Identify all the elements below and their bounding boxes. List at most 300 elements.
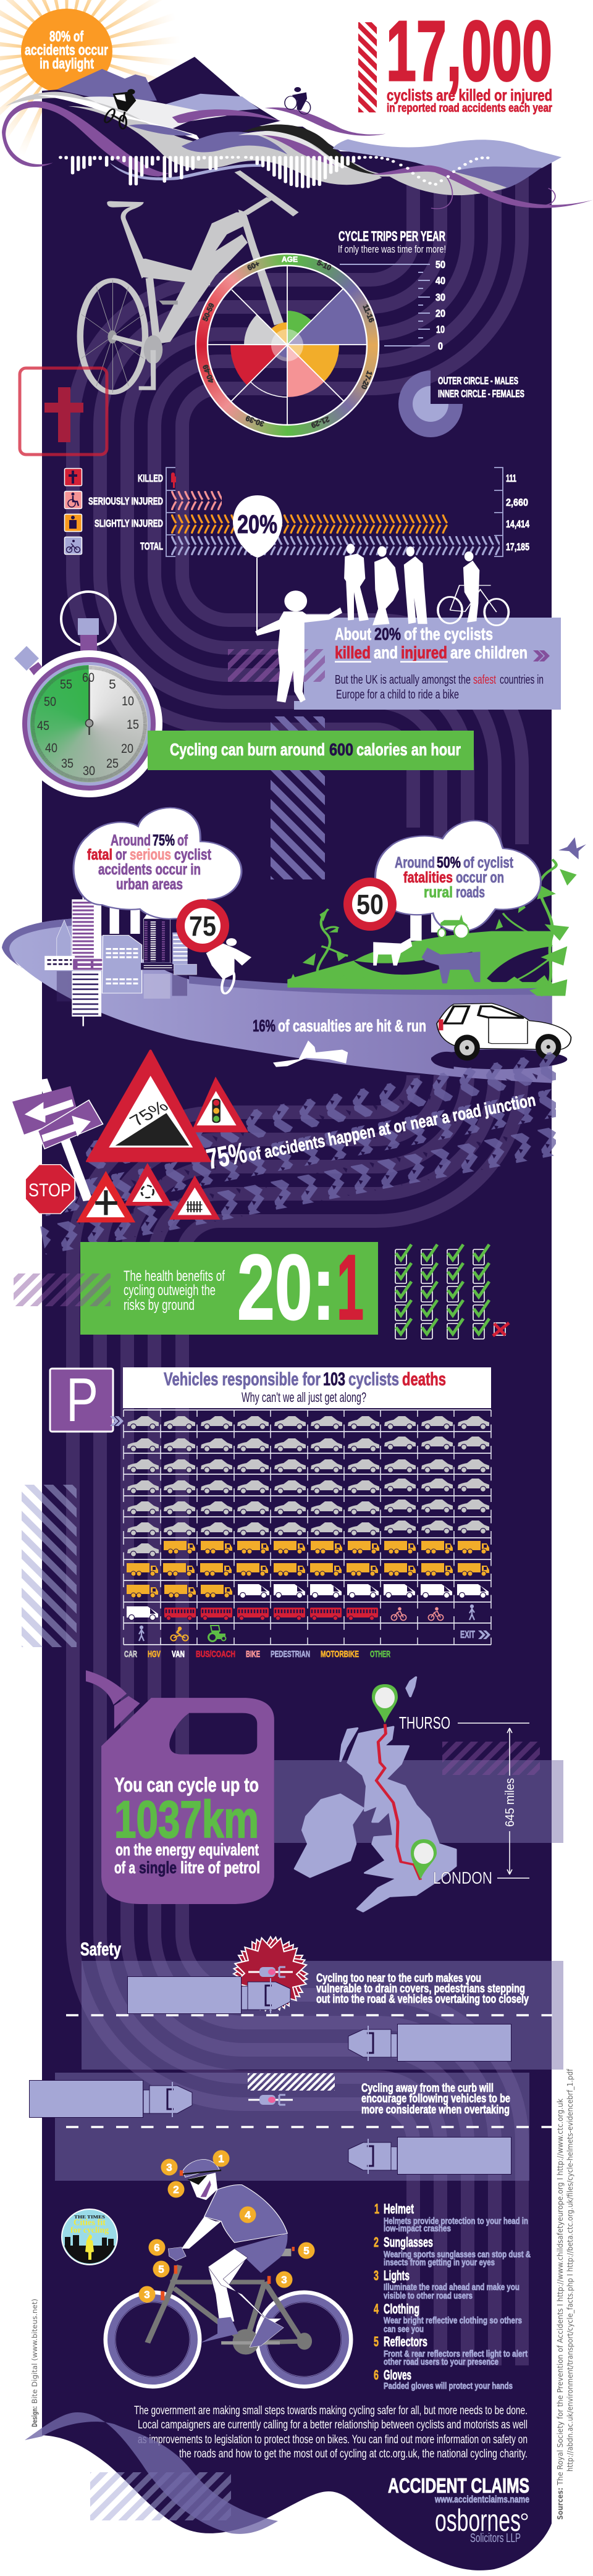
- title: 103: [323, 1369, 345, 1390]
- hatch behind child: [228, 649, 325, 682]
- illustration: lilac road: [2, 918, 552, 1083]
- stop sign: [25, 1165, 75, 1214]
- legend: vehicle types: VAN: [172, 1649, 185, 1659]
- item: clothing: [374, 2301, 522, 2335]
- icon: 75 speed sign: 75: [189, 910, 216, 942]
- strapline: Solicitors LLP: [470, 2532, 521, 2545]
- text: sources: The Royal Society for the Prevention of Accidents I http://www.childsafetyeurope.org I http://www.ctc.org.uk: [555, 2098, 565, 2486]
- numbered markers: 5: [303, 2245, 309, 2257]
- text: curb warning: out into the road & vehicles overtaking too closely: [316, 1993, 529, 2006]
- cloud text: urban areas: [116, 876, 183, 893]
- url: www.accidentclaims.name: [434, 2494, 529, 2505]
- direction sign right: [38, 1100, 103, 1149]
- bar: killed: [171, 472, 176, 488]
- cloud text: 50%: [437, 854, 461, 871]
- text: killed and injured: killed: [335, 643, 371, 662]
- text: killed and injured: are children: [450, 643, 528, 662]
- illustration: petrol can: [86, 1670, 274, 1904]
- illustration: stopwatch: [14, 592, 162, 797]
- stopwatch ring: [61, 592, 116, 646]
- stopwatch white case: [15, 650, 162, 797]
- road dashes: [66, 2015, 552, 2127]
- text: calories: Cycling can burn around: [170, 740, 325, 759]
- icon: top view bike: [248, 2095, 293, 2105]
- cloud text: cyclist: [174, 846, 212, 863]
- stopwatch numbers: 60: [82, 671, 95, 685]
- item: lights: Illuminate the road ahead and make you: [384, 2282, 519, 2293]
- text: hit and run: of casualties are hit & run: [278, 1017, 426, 1035]
- icon: ticks and cross: [395, 1244, 509, 1339]
- item: sunglasses: Wearing sports sunglasses can stop dust &: [384, 2249, 531, 2260]
- label: Thurso: THURSO: [399, 1713, 450, 1732]
- road band upper: [82, 1961, 563, 2070]
- text: 20:1: 1: [337, 1235, 364, 1339]
- text: calories: 600: [329, 740, 353, 759]
- numbered markers: 3: [281, 2274, 287, 2286]
- cloud shape: [74, 808, 242, 934]
- legend: vehicle types: BUS/COACH: [196, 1649, 235, 1659]
- item: gloves: Gloves: [384, 2367, 411, 2383]
- legend: [398, 371, 524, 437]
- illustration: child silhouette: [255, 590, 342, 702]
- icon: jumping cyclist: [206, 938, 251, 994]
- balloon text: 20%: [237, 510, 277, 539]
- text: 20% of cyclists: of the cyclists: [404, 624, 493, 644]
- icon: killed: [64, 468, 82, 485]
- illustration: balloon with 20%: [233, 495, 282, 631]
- title: cyclists: [348, 1369, 399, 1390]
- stopwatch hand: [85, 678, 93, 735]
- text: 80% in daylight: accidents occur: [25, 42, 108, 59]
- text: closing paragraph: [134, 2404, 528, 2461]
- stopwatch ticks: [33, 668, 145, 780]
- illustration: people silhouettes: [344, 543, 508, 625]
- chart axis: 10: [436, 324, 445, 335]
- illustration: mountains and waves: [2, 69, 593, 209]
- category labels: KILLED: [138, 472, 163, 484]
- can text: 1037km: [114, 1790, 259, 1848]
- category labels: SLIGHTLY INJURED: [95, 518, 163, 529]
- icon: lorry: [127, 1976, 290, 2013]
- item: lights: [374, 2268, 519, 2301]
- row 1: [127, 1416, 489, 1429]
- cloud shape: [376, 821, 541, 941]
- row 8: [127, 1563, 489, 1576]
- cloud text: [87, 832, 212, 893]
- text: curb advice: Cycling away from the curb will: [361, 2082, 494, 2095]
- cloud text: Around: [111, 832, 151, 849]
- numbered markers: 4: [245, 2209, 251, 2221]
- map route: [376, 1724, 421, 1880]
- cloud text: [395, 854, 514, 901]
- text: curb advice: more considerate when overtaking: [361, 2104, 510, 2117]
- icon: seriously injured: [64, 492, 82, 509]
- cloud text: rural: [424, 884, 453, 901]
- icon: slate cow: [422, 947, 480, 983]
- stopwatch numbers: 55: [60, 678, 72, 692]
- row 11: [139, 1626, 226, 1642]
- icon: bird: [558, 837, 586, 860]
- logo: Accident Claims: [388, 2474, 529, 2505]
- item: sunglasses: [374, 2234, 531, 2268]
- legend: vehicle types: MOTORBIKE: [321, 1649, 359, 1659]
- values: [506, 472, 529, 553]
- pattern: hatch behind green bar: [271, 716, 325, 879]
- direction sign left: [13, 1087, 78, 1134]
- numbered markers: 3: [166, 2162, 172, 2173]
- icon: total cyclist: [64, 537, 82, 555]
- pattern: hatch near map: [442, 1742, 540, 1775]
- pattern: red hatch block: [358, 22, 377, 112]
- illustration: kitted-out cyclist: [106, 2150, 351, 2386]
- stopwatch crown: [78, 618, 99, 635]
- row 3: [127, 1459, 489, 1472]
- item: gloves: [374, 2367, 513, 2391]
- stopwatch side button: [14, 646, 43, 676]
- illustration: lying person: [273, 1041, 348, 1067]
- frame: [148, 2160, 312, 2355]
- text: safest countries: safest: [473, 673, 496, 687]
- icon: 50 speed sign: [348, 882, 392, 926]
- background: map band: [274, 1760, 563, 1843]
- can text: of a: [114, 1858, 136, 1877]
- text: sources: [555, 2068, 574, 2520]
- text: safest countries: [335, 673, 544, 702]
- crossroad sign: [78, 1172, 134, 1222]
- item: reflectors: other road users to your presence: [384, 2357, 498, 2367]
- text: safest countries: countries in: [500, 673, 544, 687]
- text: STOP: STOP: [28, 1180, 71, 1201]
- icon: oncoming lorry: [348, 2024, 511, 2062]
- item: helmet: low-impact crashes: [384, 2223, 451, 2234]
- chart subheading: If only there was time for more!: [338, 243, 446, 255]
- chart: cycle trips per year radial chart: [195, 229, 524, 437]
- row 2: [127, 1437, 489, 1451]
- values: 14,414: [506, 518, 529, 530]
- distance arrows: [458, 1723, 529, 1878]
- row 7: [127, 1541, 489, 1556]
- text: 80% in daylight: in daylight: [40, 56, 94, 72]
- can body: [101, 1698, 274, 1904]
- legend: vehicle types: OTHER: [370, 1649, 390, 1659]
- panel: children statistic: [294, 618, 561, 710]
- text: curb advice: encourage following vehicles to be: [361, 2092, 510, 2105]
- stopwatch numbers: 20: [121, 742, 133, 756]
- cloud text: of: [177, 832, 188, 849]
- numbered markers: 3: [144, 2289, 150, 2301]
- chart axis: 40: [435, 275, 445, 287]
- row 10: [127, 1605, 474, 1621]
- row 4: [127, 1479, 489, 1493]
- illustration: urban skyline: [44, 884, 196, 1026]
- map land: [295, 1677, 456, 1911]
- text: sources: Sources:: [555, 2488, 565, 2520]
- age labels: 60+: [246, 259, 261, 272]
- text: calories: calories an hour: [356, 740, 461, 759]
- background: road-like stripes: [73, 176, 522, 2365]
- badge text: Cities fit: [74, 2218, 106, 2228]
- icon: slightly injured: [64, 514, 82, 531]
- age labels: [201, 255, 376, 430]
- text: safest countries: But the UK is actually amongst the: [335, 673, 471, 687]
- roundabout sign: [125, 1164, 171, 1206]
- badge text: [70, 2215, 109, 2235]
- row 9: [127, 1584, 489, 1598]
- pin: London: [411, 1839, 437, 1879]
- item: sunglasses: 2: [374, 2234, 379, 2250]
- text: curb warning: Cycling too near to the curb makes you: [316, 1972, 481, 1985]
- numbered markers: 6: [154, 2242, 160, 2254]
- illustration: big bicycle: [80, 170, 299, 393]
- scenario: cycling too near curb: [127, 1928, 529, 2020]
- panel: safety checklist: [374, 2201, 531, 2391]
- item: helmet: 1: [374, 2201, 379, 2217]
- cloud text: Around: [395, 854, 435, 871]
- numbered markers: 1: [218, 2153, 224, 2165]
- text: hit and run: [253, 1017, 426, 1035]
- text: curb warning: vulnerable to drain covers, pedestrians stepping: [316, 1982, 525, 1995]
- item: lights: Lights: [384, 2268, 410, 2283]
- cloud text: accidents occur in: [98, 861, 201, 878]
- panel: 17,000 headline: [358, 4, 552, 115]
- text: design credit: Bite Digital (www.biteus.net): [30, 2299, 39, 2404]
- age labels: AGE: [282, 255, 298, 264]
- panel: urban cloud: [74, 808, 242, 934]
- stopwatch numbers: 5: [109, 678, 116, 692]
- text: killed and injured: [335, 643, 528, 662]
- legend: vehicle types: BIKE: [246, 1649, 260, 1659]
- category labels: SERIOUSLY INJURED: [88, 495, 163, 507]
- item: lights: 3: [374, 2268, 379, 2283]
- age labels: 21-29: [309, 414, 330, 430]
- text: road junction: 75%: [204, 1136, 250, 1175]
- panel: calories bar: [148, 731, 474, 770]
- age labels: 11-16: [361, 303, 376, 324]
- values: 17,185: [506, 541, 529, 553]
- title: deaths: [402, 1369, 446, 1390]
- cloud text: fatalities: [403, 869, 453, 886]
- icon: oncoming lorry: [348, 2137, 511, 2174]
- can text: [114, 1774, 260, 1877]
- numbered markers: 2: [173, 2184, 179, 2196]
- text: killed or injured: cyclists are killed or injured: [387, 86, 552, 104]
- text: each year: in reported road accidents each year: [387, 102, 552, 115]
- cloud text: 75%: [153, 832, 175, 849]
- chart heading: CYCLE TRIPS PER YEAR: [339, 229, 445, 244]
- pattern: hatch over green box: [14, 1273, 111, 1306]
- rider: [161, 2160, 295, 2347]
- wheel rim with age gradient: [195, 253, 379, 437]
- item: helmet: [374, 2201, 528, 2234]
- icon: sun rays: [0, 0, 181, 166]
- item: helmet: Helmet: [384, 2201, 414, 2217]
- icon: tractor: [438, 915, 469, 938]
- icon: 75 speed sign: [180, 904, 225, 948]
- label: London: LONDON: [433, 1868, 492, 1887]
- exit label: EXIT: [460, 1629, 475, 1640]
- scenario: cycling away from curb: [30, 2073, 510, 2117]
- text: 20:1: 20:: [237, 1235, 335, 1339]
- stopwatch numbers: 30: [83, 764, 95, 778]
- illustration: bottom ribbon: [25, 2412, 278, 2534]
- badge text: THE TIMES: [74, 2215, 105, 2220]
- text: curb advice: [361, 2082, 510, 2117]
- text: curb warning: [316, 1972, 529, 2006]
- panel: vehicles heading: [123, 1367, 491, 1408]
- cloud text: serious: [130, 846, 171, 863]
- hatch overlay: [303, 649, 325, 682]
- legend: INNER CIRCLE - FEMALES: [438, 388, 524, 400]
- brackets: [166, 468, 503, 556]
- stopwatch neck: [80, 635, 97, 652]
- item: reflectors: [374, 2334, 528, 2367]
- text: equaliser bars and dots: [61, 157, 488, 187]
- text: health benefits: risks by ground: [124, 1297, 195, 1314]
- text: health benefits: The health benefits of: [124, 1268, 225, 1285]
- large gradient triangle sign: 75%: [125, 1097, 173, 1130]
- text: health benefits: [124, 1268, 225, 1314]
- subtitle: Why can't we all just get along?: [242, 1390, 366, 1405]
- cloud text: fatal: [87, 846, 112, 863]
- text: design credit: Design:: [30, 2406, 39, 2427]
- illustration: white car: [431, 1004, 571, 1069]
- panel: daylight sun: [21, 9, 112, 94]
- legend: OUTER CIRCLE - MALES: [438, 375, 518, 387]
- label: distance: 645 miles: [503, 1778, 517, 1827]
- panel: rural cloud: [376, 821, 541, 941]
- icon: white cow: [373, 938, 412, 965]
- row 6: [127, 1521, 489, 1535]
- text: safest countries: Europe for a child to ride a bike: [336, 688, 459, 702]
- item: gloves: Padded gloves will protect your hands: [384, 2381, 513, 2391]
- numbered markers: [138, 2150, 315, 2302]
- text: hit and run: 16%: [253, 1017, 275, 1035]
- stopwatch dial: [30, 665, 148, 782]
- traffic light sign: [191, 1076, 248, 1132]
- chart axis: 30: [435, 292, 445, 303]
- legend: vehicle types: HGV: [148, 1649, 161, 1659]
- age labels: 5-10: [316, 258, 333, 272]
- item: clothing: Wear bright reflective clothing so others: [384, 2315, 522, 2326]
- chart: parking grid of vehicles: [124, 1410, 491, 1645]
- legend: vehicle types: [124, 1649, 390, 1659]
- icon: lorry: [30, 2080, 192, 2117]
- legend: vehicle types: PEDESTRIAN: [271, 1649, 310, 1659]
- stopwatch numbers: [37, 671, 139, 778]
- icon: cross in red rounded frame: [20, 368, 107, 455]
- stopwatch numbers: 40: [45, 741, 57, 755]
- item: clothing: can see you: [384, 2324, 424, 2335]
- stopwatch numbers: 50: [44, 695, 56, 709]
- grid lines: [124, 1410, 491, 1645]
- category labels: TOTAL: [140, 540, 163, 552]
- age labels: 40-49: [201, 363, 216, 384]
- illustration: green countryside: [287, 860, 577, 996]
- text: killed and injured: injured: [401, 643, 447, 662]
- pattern: bottom hatch: [90, 2472, 231, 2520]
- panel: 20:1 health benefit: [80, 1235, 378, 1339]
- icon: chevrons: [533, 650, 550, 661]
- can handle spout: [86, 1670, 274, 1904]
- stopwatch purple ring: [22, 657, 156, 791]
- cloud text: of cyclist: [463, 854, 514, 871]
- cloud text: roads: [456, 884, 485, 901]
- can text: litre of petrol: [180, 1858, 260, 1877]
- icon: collision burst: [225, 1928, 316, 2020]
- can text: single: [139, 1858, 177, 1877]
- text: road junction: [204, 1090, 537, 1175]
- wheel rim outlines: [196, 254, 379, 437]
- values: 2,660: [506, 497, 528, 508]
- age labels: 17-20: [360, 370, 374, 390]
- age labels: 50-59: [201, 301, 216, 322]
- text: 20% of cyclists: 20%: [374, 624, 401, 644]
- text: 20% of cyclists: [335, 624, 493, 644]
- sign post: [38, 1078, 93, 1201]
- railway sign: [170, 1177, 219, 1219]
- map: United Kingdom route: [295, 1677, 529, 1911]
- item: clothing: Clothing: [384, 2301, 419, 2317]
- icon: mountain cyclist: [103, 89, 136, 128]
- text: 20% of cyclists: About: [335, 624, 371, 644]
- pattern: lilac hatch: [22, 1485, 77, 1647]
- wedge chart sectors: [208, 266, 367, 424]
- stopwatch numbers: 45: [37, 719, 49, 733]
- stopwatch numbers: 15: [127, 718, 139, 732]
- category labels: [88, 472, 163, 552]
- bar: slightly injured: [171, 514, 448, 534]
- stopwatch numbers: 25: [106, 757, 119, 771]
- text: killed and injured: and: [374, 643, 398, 662]
- large gradient triangle sign: [87, 1051, 210, 1161]
- item: sunglasses: insects from getting in your eyes: [384, 2257, 495, 2268]
- text: sources: http://abdn.ac.uk/environment/transport/cycle_facts.php I http://beta.ctc.org.uk/files/cycle-helmets-evidencebrf_1.pdf: [565, 2068, 574, 2472]
- item: lights: visible to other road users: [384, 2291, 473, 2301]
- chart axis: 20: [435, 308, 445, 319]
- row 5: [127, 1500, 489, 1514]
- icon: hill cyclist: [285, 87, 311, 114]
- numbered markers: 5: [158, 2263, 164, 2275]
- text: health benefits: cycling outweigh the: [124, 1282, 216, 1299]
- cloud text: occur on: [456, 869, 504, 886]
- bar: seriously injured: [171, 491, 222, 510]
- item: sunglasses: Sunglasses: [384, 2234, 433, 2250]
- wheels: [106, 2293, 351, 2386]
- chart: casualty counts with tread bars: [64, 468, 529, 556]
- pattern: white hatch: [248, 2073, 335, 2091]
- stopwatch numbers: 35: [61, 757, 74, 771]
- item: reflectors: Reflectors: [384, 2334, 427, 2349]
- icon: 50 speed sign: 50: [356, 889, 384, 920]
- legend: vehicle types: CAR: [124, 1649, 137, 1659]
- item: helmet: Helmets provide protection to your head in: [384, 2216, 528, 2226]
- icon: parking sign: [50, 1366, 124, 1435]
- chart axis: [340, 259, 445, 352]
- can text: You can cycle up to: [114, 1774, 259, 1796]
- icon: Times Cities fit for cycling badge: [62, 2209, 117, 2270]
- stopwatch lilac ring: [27, 662, 151, 786]
- age labels: 30-39: [245, 414, 265, 429]
- bar: total: [171, 536, 500, 555]
- icon: parking sign: P: [66, 1366, 98, 1435]
- illustration: road signs: [13, 1051, 248, 1222]
- logo: Accident Claims: ACCIDENT CLAIMS: [388, 2474, 529, 2497]
- stopwatch numbers: 10: [122, 694, 134, 708]
- chart axis: 50: [435, 259, 445, 271]
- item: clothing: 4: [374, 2301, 379, 2317]
- item: reflectors: 5: [374, 2334, 379, 2349]
- road band lower: [55, 2073, 529, 2181]
